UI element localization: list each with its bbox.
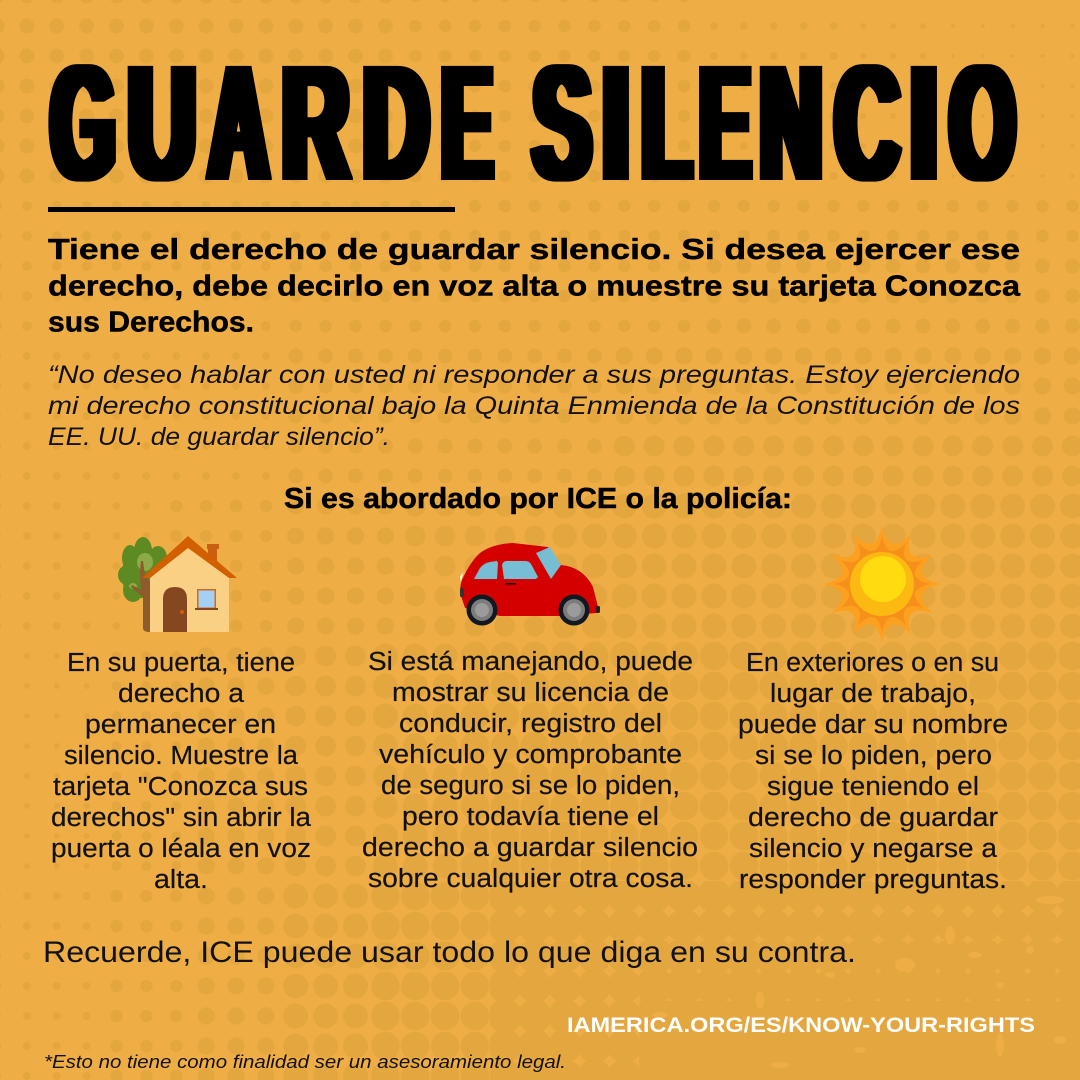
title: O (950, 31, 1015, 214)
quoted statement: “No deseo hablar con usted ni responder a sus preguntas. Estoy ejerciendo (48, 361, 1020, 389)
text: while driving: derecho a guardar silencio (362, 834, 698, 862)
title: E (700, 31, 750, 214)
intro statement: Tiene el derecho de guardar silencio. Si desea ejercer ese (48, 234, 1020, 266)
icon: red car (460, 543, 600, 626)
title: A (209, 31, 268, 214)
text: outdoors or at work (738, 649, 1008, 894)
text: while driving: pero todavía tiene el (402, 803, 659, 831)
quoted statement: EE. UU. de guardar silencio”. (48, 423, 390, 451)
text: at your door: permanecer en (85, 711, 276, 739)
text: outdoors or at work: silencio y negarse a (749, 835, 998, 863)
title: S (533, 31, 591, 214)
text: at your door (51, 649, 312, 894)
text: outdoors or at work: responder preguntas. (739, 866, 1007, 894)
title: N (760, 31, 822, 214)
text: while driving: Si está manejando, puede (368, 648, 693, 676)
title: L (642, 31, 691, 214)
title: R (282, 31, 349, 214)
title: U (128, 31, 196, 214)
intro statement: derecho, debe decirlo en voz alta o muestre su tarjeta Conozca (48, 270, 1021, 302)
text: at your door: tarjeta "Conozca sus (53, 773, 308, 801)
subheading: Si es abordado por ICE o la policía: (284, 483, 792, 515)
title: D (363, 31, 429, 214)
intro statement (48, 234, 1021, 338)
website link: IAMERICA.ORG/ES/KNOW-YOUR-RIGHTS (567, 1013, 1035, 1037)
intro statement: sus Derechos. (48, 306, 254, 338)
title: I (910, 31, 938, 214)
disclaimer: *Esto no tiene como finalidad ser un asesoramiento legal. (44, 1052, 566, 1072)
text: outdoors or at work: derecho de guardar (748, 804, 999, 832)
title: G (51, 31, 115, 214)
text: outdoors or at work: puede dar su nombre (738, 711, 1008, 739)
text: outdoors or at work: En exteriores o en su (746, 649, 999, 677)
title: E (442, 31, 492, 214)
text: at your door: derecho a (118, 680, 245, 708)
text: at your door: puerta o léala en voz (51, 835, 311, 863)
text: while driving: vehículo y comprobante (379, 741, 682, 769)
text: while driving: mostrar su licencia de (392, 679, 669, 707)
icon: house (118, 536, 237, 632)
text: outdoors or at work: sigue teniendo el (767, 773, 979, 801)
title underline (48, 207, 455, 212)
quoted statement (48, 361, 1020, 451)
title: I (602, 31, 630, 214)
text: at your door: alta. (154, 866, 208, 894)
reminder: Recuerde, ICE puede usar todo lo que diga en su contra. (43, 936, 856, 969)
text: while driving: de seguro si se lo piden, (381, 772, 680, 800)
text: while driving: sobre cualquier otra cosa. (368, 865, 693, 893)
text: while driving: conducir, registro del (399, 710, 662, 738)
text: at your door: derechos" sin abrir la (51, 804, 312, 832)
text: at your door: En su puerta, tiene (67, 649, 295, 677)
text: at your door: silencio. Muestre la (64, 742, 299, 770)
icon: sun (824, 526, 940, 642)
quoted statement: mi derecho constitucional bajo la Quinta Enmienda de la Constitución de los (48, 392, 1020, 420)
text: while driving (362, 648, 698, 893)
title: C (835, 31, 899, 214)
text: outdoors or at work: si se lo piden, pero (755, 742, 992, 770)
text: outdoors or at work: lugar de trabajo, (770, 680, 976, 708)
